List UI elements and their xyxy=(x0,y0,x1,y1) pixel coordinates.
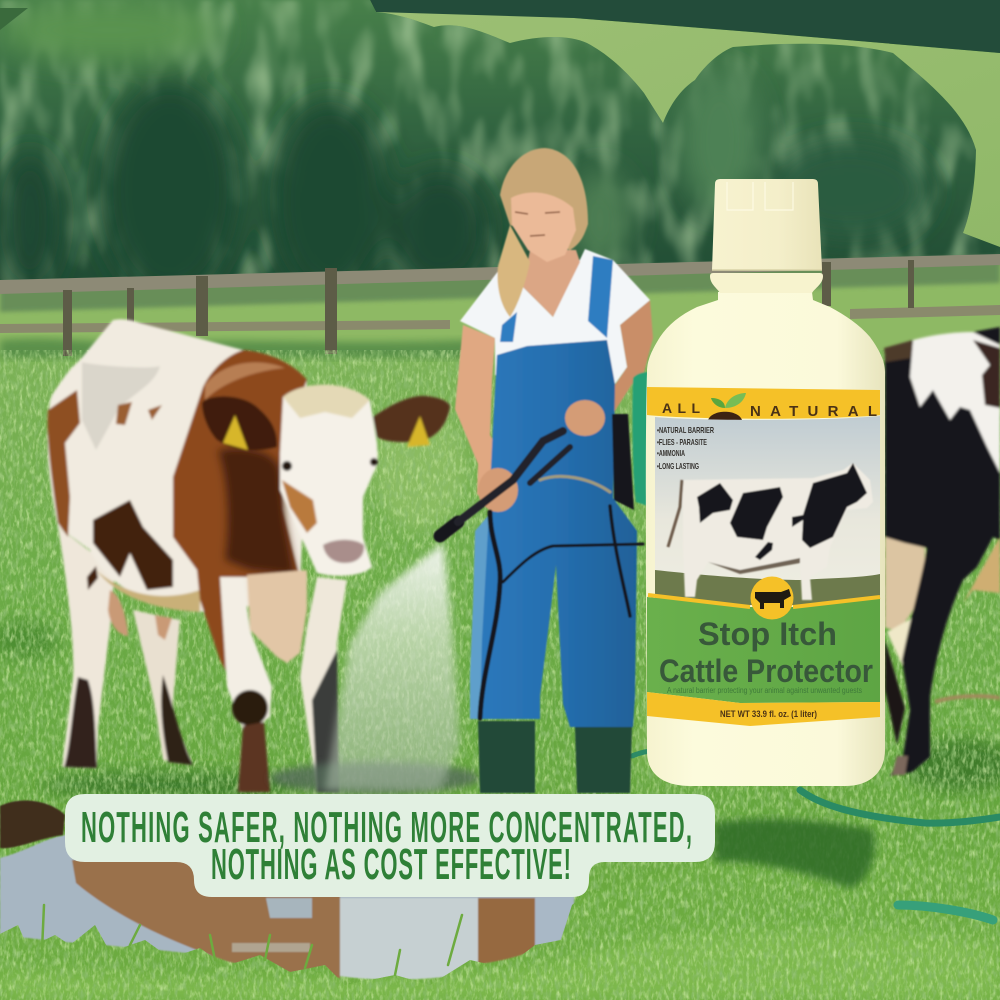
sprayer wand xyxy=(440,431,643,718)
label: feature list: •AMMONIA xyxy=(657,448,685,458)
muddy puddle xyxy=(0,835,575,979)
shadow under bottle xyxy=(714,819,875,888)
label: bottom banner xyxy=(647,692,880,726)
bottle: cap xyxy=(712,179,822,270)
cow: dark flank spot xyxy=(93,500,173,590)
woman: left arm xyxy=(455,325,520,512)
right cow: black hide xyxy=(885,327,1000,776)
label: top banner: NATURAL xyxy=(750,403,877,420)
right cow: belly and udder xyxy=(963,537,1000,603)
woman: face xyxy=(511,193,576,262)
label: net weight: NET WT 33.9 fl. oz. (1 liter) xyxy=(720,709,817,720)
right cow xyxy=(884,327,1000,776)
woman: hands xyxy=(478,400,605,512)
right cow: white back xyxy=(910,332,1000,473)
water spray xyxy=(270,543,480,794)
background: tree line xyxy=(0,0,1000,300)
label: feature list: •NATURAL BARRIER xyxy=(657,425,714,435)
label: feature list xyxy=(657,425,714,471)
woman spraying xyxy=(440,148,653,793)
woman: overalls bib and trousers xyxy=(480,340,637,727)
cow: front legs xyxy=(220,577,347,792)
label: product name xyxy=(659,616,873,689)
label: product name: Stop Itch xyxy=(698,616,837,652)
foreground grass fringe xyxy=(0,903,1000,998)
woman: straps xyxy=(500,256,613,342)
meadow shading patches xyxy=(0,410,1000,799)
cow: nose xyxy=(323,540,364,563)
right cow: mane edge xyxy=(884,340,913,362)
caption: background shape xyxy=(65,794,715,897)
label: field strip xyxy=(655,570,880,605)
woman: neck and chest xyxy=(523,250,580,317)
cow: rear legs xyxy=(58,527,193,768)
right cow: brown patch xyxy=(973,340,1000,408)
cow: small hide spots xyxy=(116,402,162,425)
cow: body xyxy=(47,319,307,612)
woman: boots xyxy=(478,721,632,793)
cow: cheek patch xyxy=(282,480,317,533)
grass texture dark xyxy=(0,350,1000,1000)
cow: head xyxy=(280,388,378,576)
right cow: straw on ground xyxy=(935,696,1000,702)
woman: t-shirt xyxy=(460,249,650,384)
label: dairy cow illustration xyxy=(668,463,873,600)
background: meadow xyxy=(0,345,1000,1000)
label: top banner xyxy=(647,387,880,420)
caption: text xyxy=(81,804,692,889)
cow: light shoulder stripe xyxy=(205,362,285,400)
bottle: label xyxy=(647,387,880,726)
label: photo panel xyxy=(655,416,880,605)
bottle: body xyxy=(646,292,885,786)
woman: hair back xyxy=(500,148,588,250)
label: feature list: •LONG LASTING xyxy=(657,461,699,471)
label: yellow rule xyxy=(648,595,880,607)
label: green panel xyxy=(647,597,880,703)
woman: right arm xyxy=(567,300,653,439)
caption bubble xyxy=(65,794,715,897)
product bottle xyxy=(646,179,885,786)
cow: brisket xyxy=(247,570,307,663)
background: hillside xyxy=(370,10,1000,260)
right cow: hoof xyxy=(892,756,908,775)
background: distant tree line xyxy=(370,0,1000,53)
cow: ears with tags xyxy=(202,396,450,450)
left cow xyxy=(47,319,450,792)
label: sprout icon xyxy=(708,393,746,420)
grass texture light xyxy=(0,350,1000,1000)
label: cow badge xyxy=(750,576,794,620)
cow: underside shading xyxy=(96,570,200,612)
sprayer coil hose xyxy=(612,414,634,510)
label: top banner: ALL xyxy=(662,400,700,416)
label: product name: Cattle Protector xyxy=(659,653,873,689)
wooden fence xyxy=(0,254,1000,356)
cow: back fold shading xyxy=(82,362,160,450)
mud bank xyxy=(0,800,65,848)
cow: eyes xyxy=(282,458,378,471)
woman: far trouser leg xyxy=(470,510,520,719)
cow: flank brown patch xyxy=(48,390,80,537)
foreground grass blades xyxy=(42,880,590,975)
label: feature list: •FLIES - PARASITE xyxy=(657,437,707,447)
caption: text: NOTHING SAFER, NOTHING MORE CONCENTRATED, xyxy=(81,804,692,852)
label: tagline: A natural barrier protecting your animal against unwanted guests xyxy=(667,686,862,695)
background: far field behind fence xyxy=(0,256,1000,358)
woman: eyes and mouth xyxy=(515,212,560,236)
caption: text: NOTHING AS COST EFFECTIVE! xyxy=(211,841,571,889)
bottle: neck collar xyxy=(710,273,823,293)
cow: small dark spot xyxy=(87,566,98,590)
cow: neck brown hide xyxy=(173,350,307,683)
green sprayer tank xyxy=(632,372,648,506)
woman: ponytail xyxy=(498,225,530,317)
cow: forelock xyxy=(283,385,370,418)
cow: neck dark shading xyxy=(218,448,295,575)
garden hose xyxy=(632,750,1000,920)
right cow: far hind leg xyxy=(885,640,905,745)
